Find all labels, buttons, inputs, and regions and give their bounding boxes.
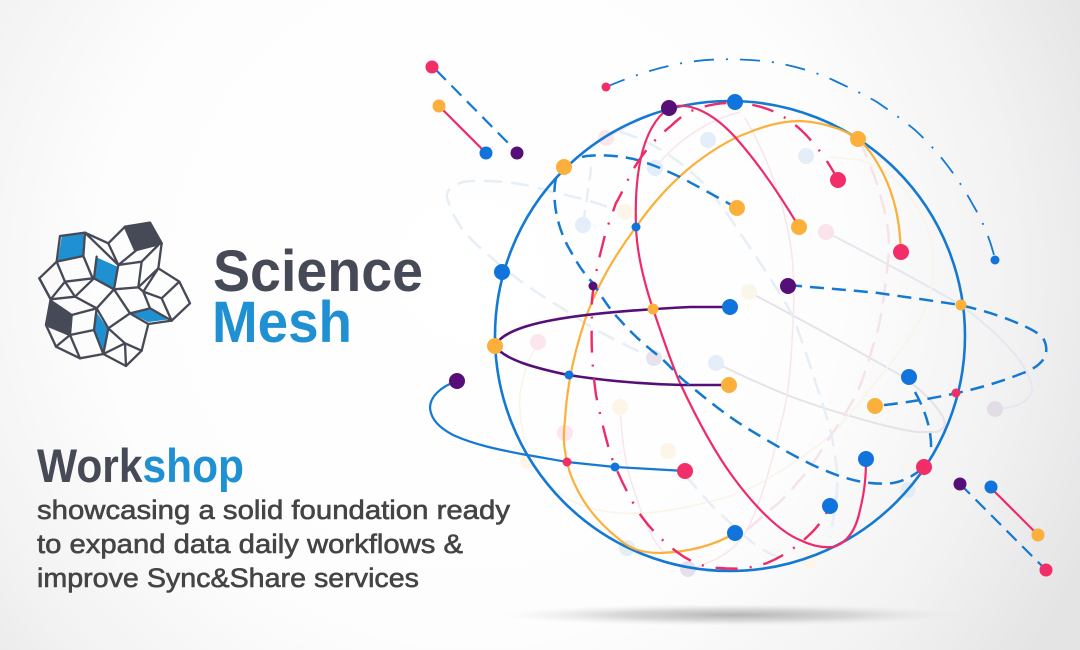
purple orbit — [495, 307, 730, 385]
dash-dot blue arc — [606, 59, 995, 259]
dash-dot pink orbit — [592, 103, 838, 569]
pink meridians — [636, 106, 866, 547]
globe outline — [495, 101, 965, 571]
logo wordmark: Science — [213, 239, 423, 304]
description text: showcasing a solid foundation ready — [37, 495, 511, 525]
description text: improve Sync&Share services — [37, 563, 419, 593]
dashed blue orbits — [436, 70, 1046, 570]
workshop heading: Workshop — [37, 439, 244, 492]
orange meridian — [564, 121, 901, 553]
description text — [37, 495, 511, 593]
description text: to expand data daily workflows & — [37, 529, 463, 559]
nodes — [426, 60, 1052, 576]
ground shadow — [500, 604, 970, 626]
logo wordmark: Mesh — [212, 290, 352, 355]
blue orbit — [430, 381, 685, 471]
short pink connector lines — [439, 106, 1038, 535]
faint background orbits — [447, 112, 1032, 569]
logo wordmark — [212, 239, 423, 355]
faint nodes — [520, 130, 1003, 577]
logo icon — [39, 223, 190, 366]
